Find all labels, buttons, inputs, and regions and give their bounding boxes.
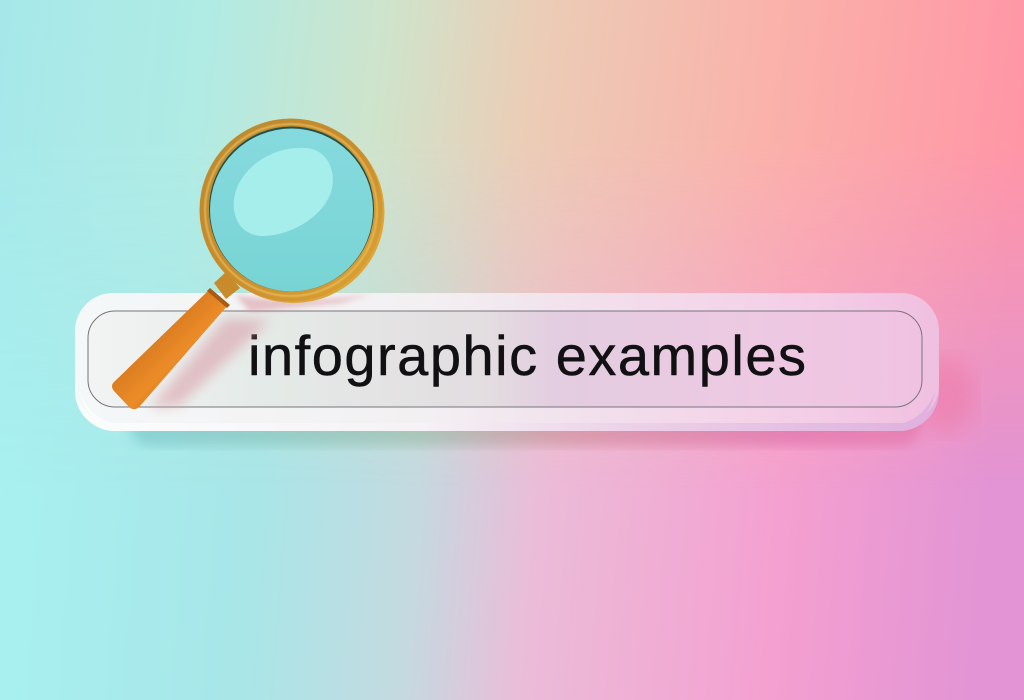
lens xyxy=(210,128,373,292)
search bar xyxy=(75,293,939,431)
search bar shadow xyxy=(130,357,975,446)
lens shadow xyxy=(235,294,372,312)
icon: magnifying glass xyxy=(112,118,384,409)
lens glare xyxy=(234,148,333,236)
ferrule xyxy=(214,272,240,299)
handle shadow xyxy=(150,318,270,408)
handle collar xyxy=(207,288,230,308)
rim xyxy=(202,121,384,303)
handle xyxy=(112,290,228,409)
search text: infographic examples xyxy=(248,324,806,387)
